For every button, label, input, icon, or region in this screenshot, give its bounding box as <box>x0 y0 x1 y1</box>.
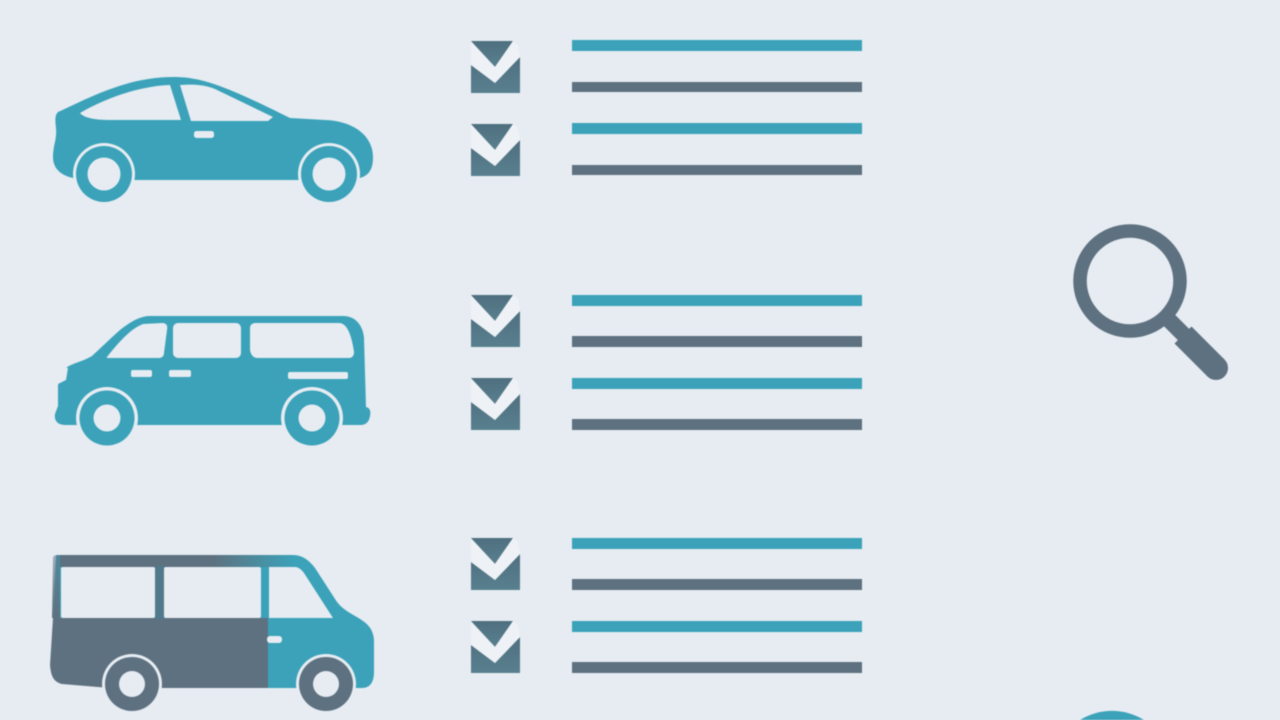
icon: magnifying glass <box>1080 231 1228 380</box>
checklist: row 1 item 2 <box>471 123 862 176</box>
icon: passenger van <box>50 555 374 714</box>
icon: sedan car <box>53 77 373 205</box>
checklist: row 3 item 2 <box>471 621 862 673</box>
icon: minivan <box>55 316 370 449</box>
checklist: row 2 item 1 <box>471 295 862 347</box>
partial teal circle at bottom edge <box>1080 711 1144 720</box>
checklist: row 3 item 1 <box>471 538 862 590</box>
checklist: row 1 item 1 <box>471 40 862 93</box>
checklist: row 2 item 2 <box>471 378 862 430</box>
